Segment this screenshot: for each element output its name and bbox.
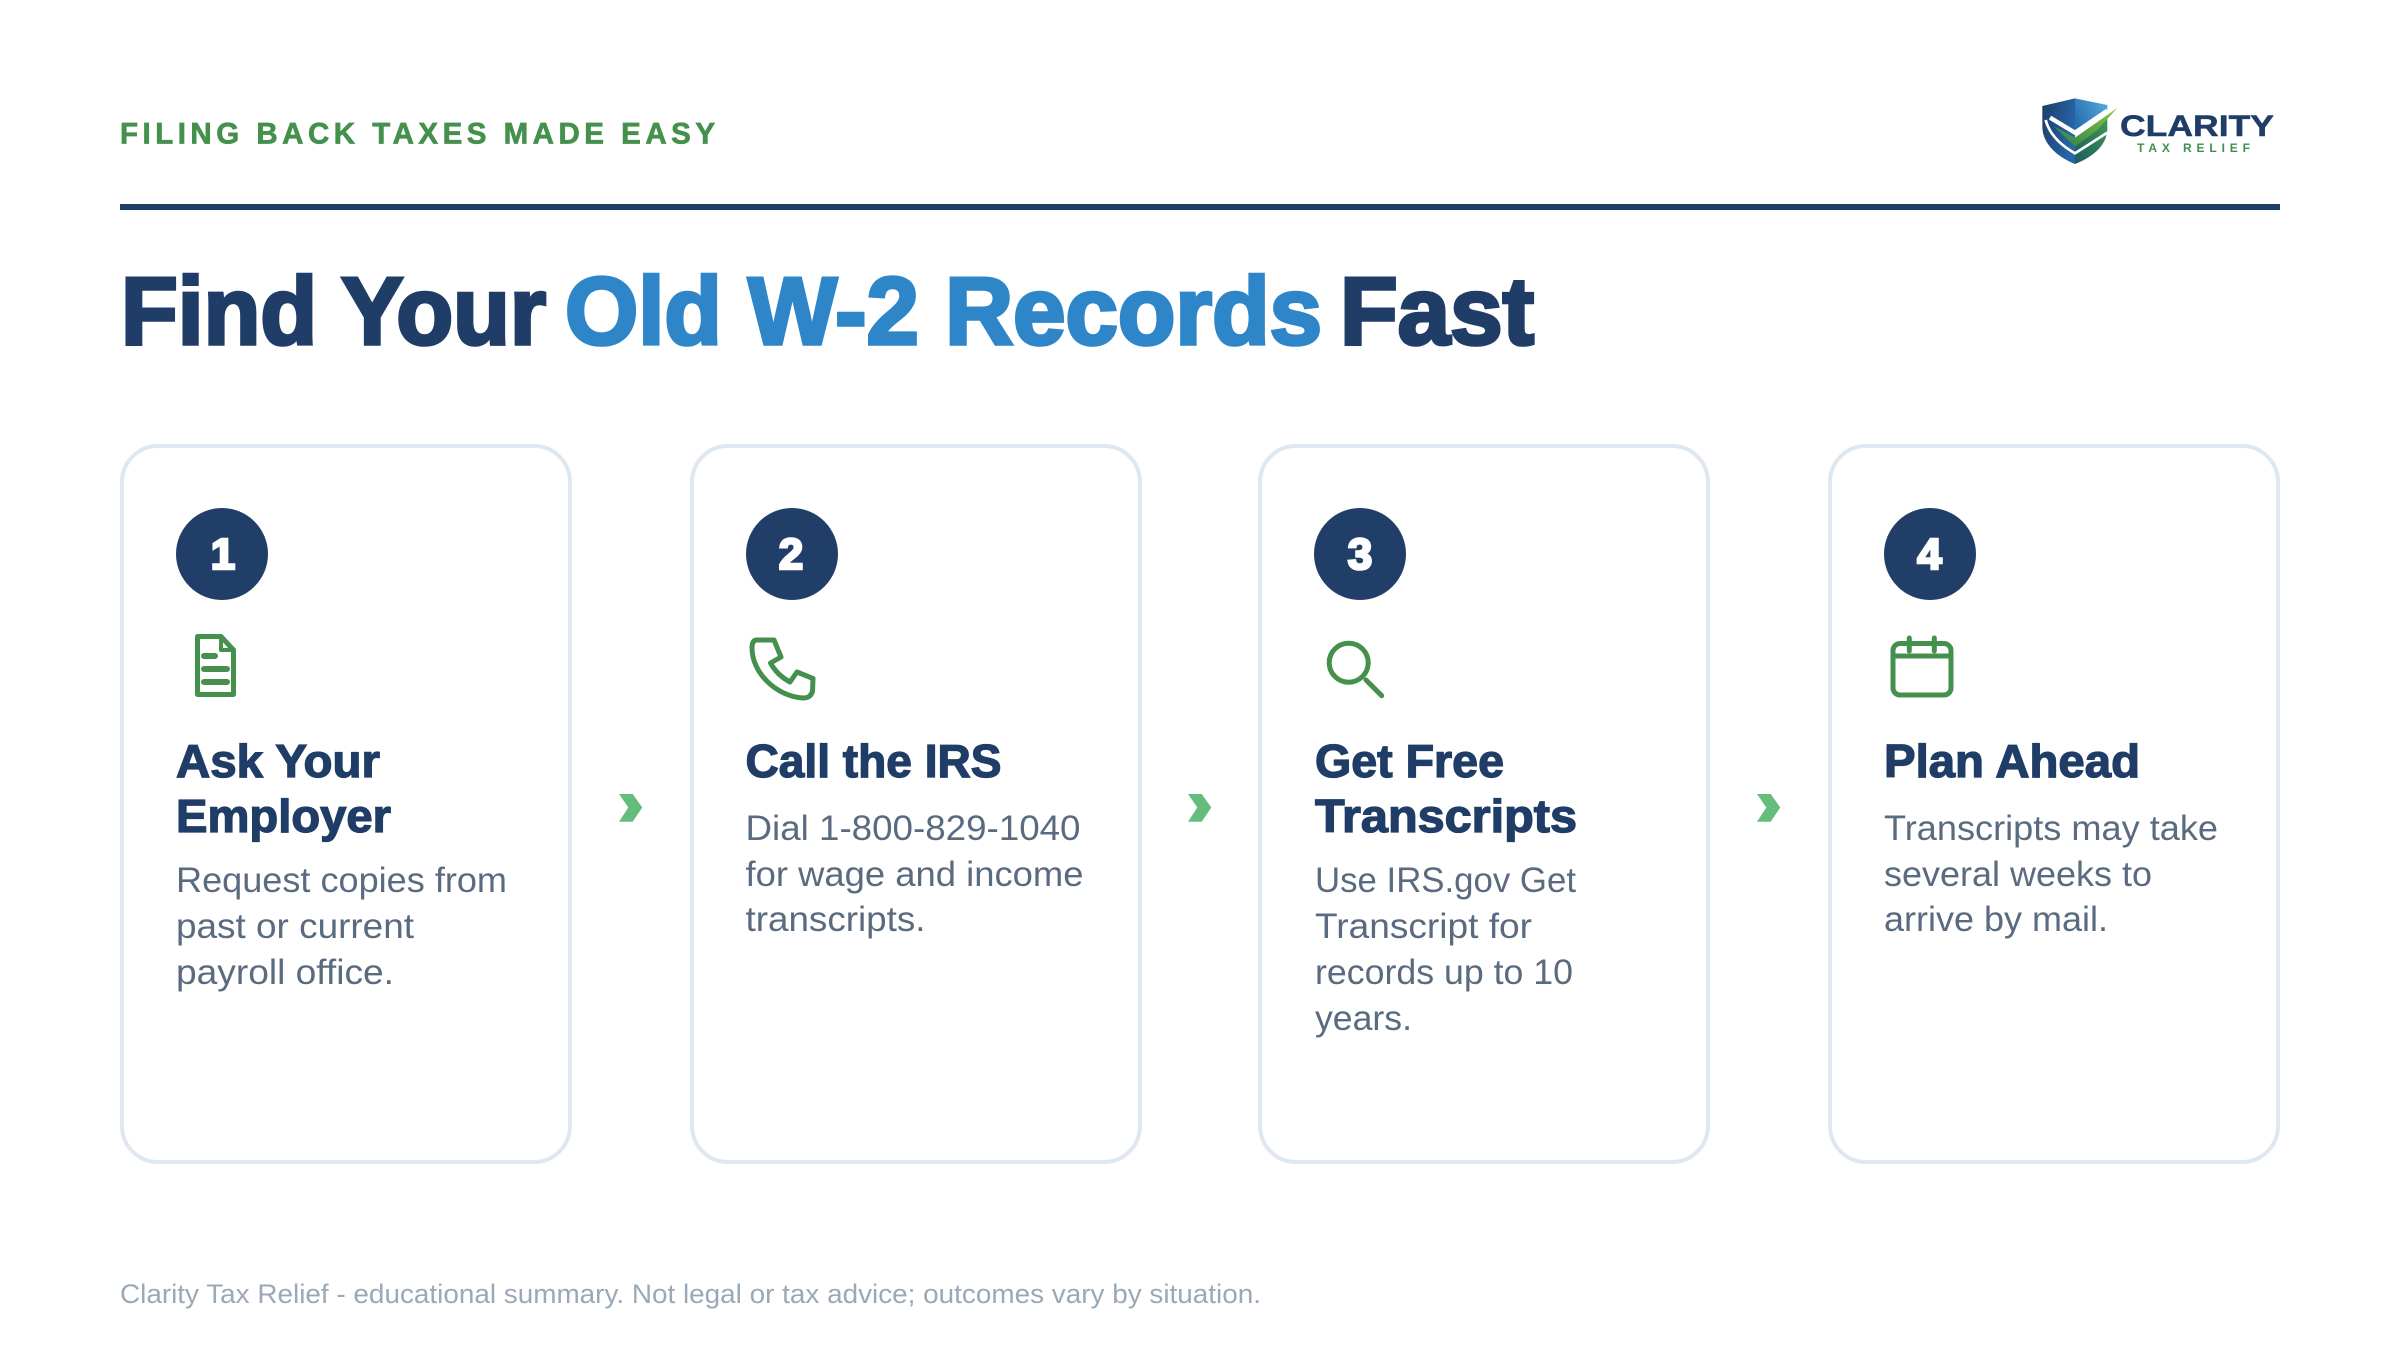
body text: records up to 10 [1315, 953, 1573, 992]
body text: Dial 1-800-829-1040 [746, 809, 1080, 848]
body text [1884, 809, 2218, 939]
body text: Request copies from [176, 861, 507, 900]
icon: phone [752, 640, 813, 698]
title: Old W-2 Records [565, 258, 1322, 365]
logo wordmark: CLARITY [2120, 110, 2274, 143]
body text: several weeks to [1884, 855, 2152, 894]
body text: transcripts. [746, 900, 926, 939]
step number 4 [1884, 508, 1976, 600]
body text: arrive by mail. [1884, 900, 2108, 939]
body text: Use IRS.gov Get [1315, 861, 1576, 900]
step number 2: 2 [779, 530, 803, 579]
step number 1 [176, 508, 268, 600]
logo tagline: TAX RELIEF [2137, 141, 2250, 155]
panel: step 1 [122, 446, 570, 1162]
logo: Clarity Tax Relief [2042, 98, 2274, 164]
arrow 1 [619, 794, 642, 822]
panel: step 2 [692, 446, 1140, 1162]
body text [1315, 861, 1576, 1038]
step number 2 [746, 508, 838, 600]
icon: document [198, 636, 234, 694]
step number 4: 4 [1917, 530, 1942, 579]
body text: Transcripts may take [1884, 809, 2218, 848]
panel: step 4 [1830, 446, 2278, 1162]
body text: Transcript for [1315, 907, 1532, 946]
heading: Ask Your [176, 735, 380, 787]
body text: years. [1315, 999, 1412, 1038]
heading: Call the IRS [746, 735, 1002, 787]
heading: Get Free [1315, 735, 1504, 787]
icon: shield with check [2042, 98, 2117, 164]
footer disclaimer: Clarity Tax Relief - educational summary. Not legal or tax advice; outcomes vary by situation. [120, 1279, 1261, 1309]
body text: past or current [176, 907, 414, 946]
heading: Plan Ahead [1884, 735, 2140, 787]
heading: Transcripts [1315, 790, 1577, 842]
heading [1315, 735, 1577, 842]
heading [176, 735, 391, 842]
body text: for wage and income [746, 855, 1084, 894]
title: Find Your [121, 258, 546, 365]
heading: Employer [176, 790, 391, 842]
panel: step 3 [1260, 446, 1708, 1162]
body text [176, 861, 507, 992]
step number 3 [1314, 508, 1406, 600]
title: Fast [1340, 258, 1534, 365]
header rule [120, 204, 2280, 210]
title [121, 258, 1534, 365]
eyebrow heading: FILING BACK TAXES MADE EASY [120, 118, 715, 150]
arrow 2 [1188, 794, 1211, 822]
body text [746, 809, 1084, 939]
step number 1: 1 [211, 530, 235, 579]
icon: magnifier [1329, 643, 1382, 696]
body text: payroll office. [176, 953, 394, 992]
icon: calendar [1893, 638, 1951, 695]
step number 3: 3 [1348, 530, 1372, 579]
arrow 3 [1757, 794, 1780, 822]
